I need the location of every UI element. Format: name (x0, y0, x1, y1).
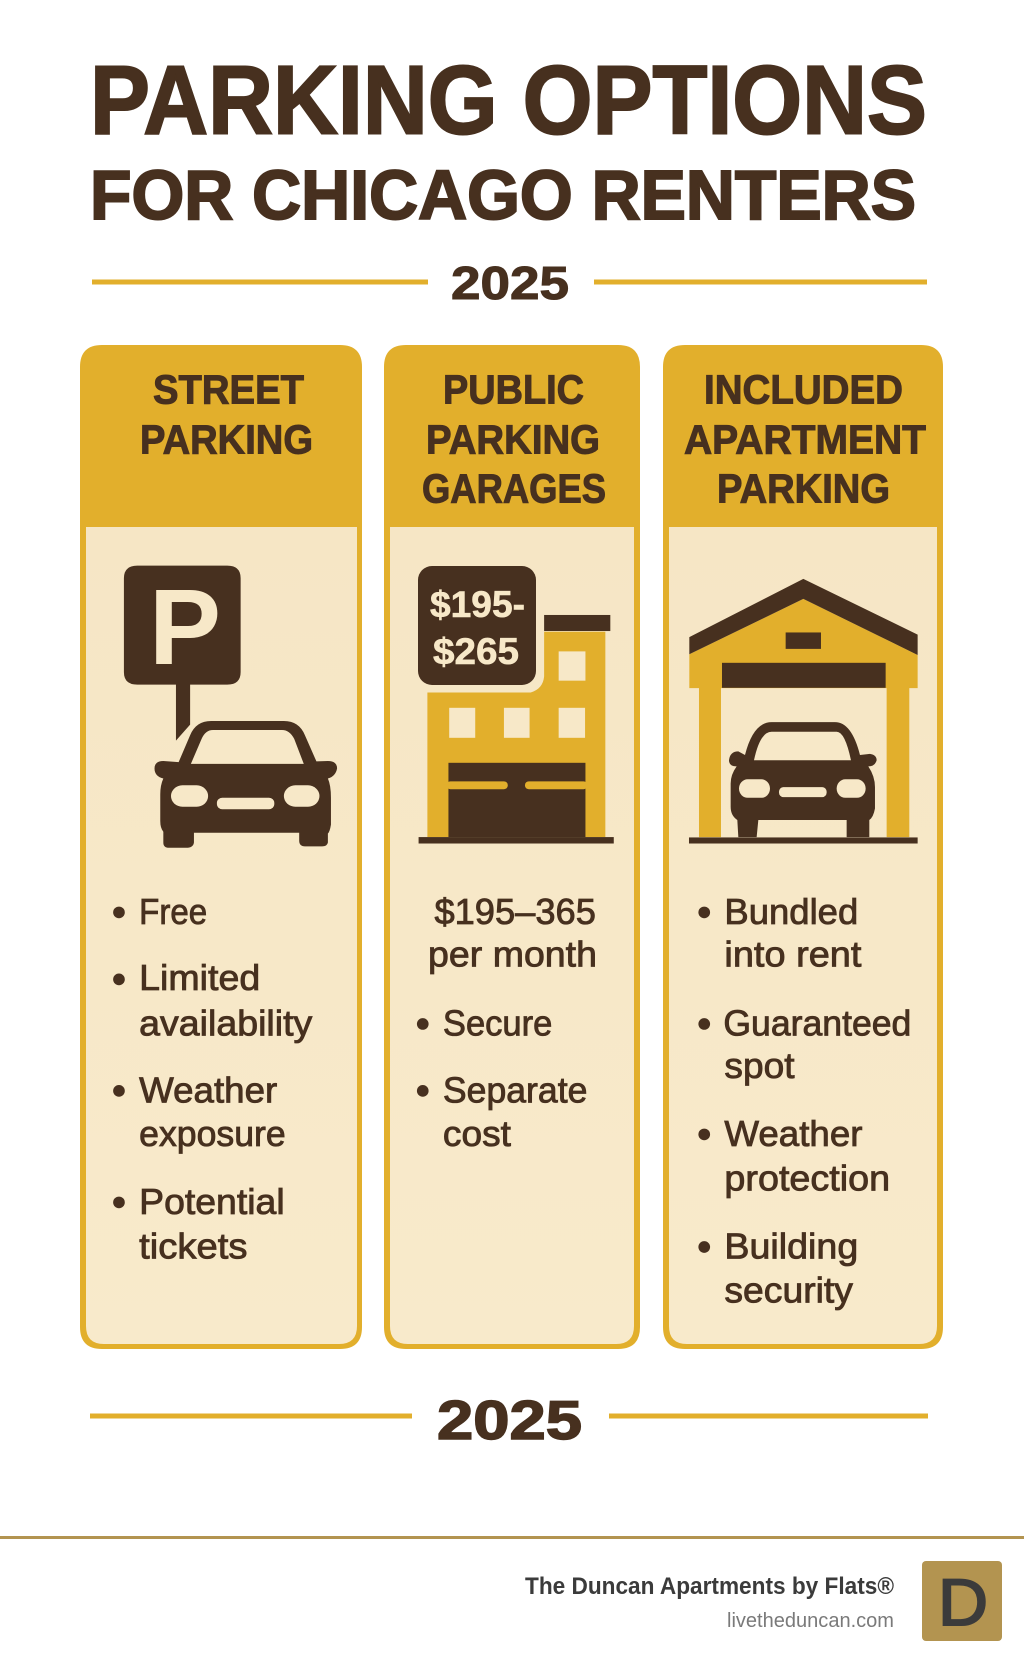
heading: included apartment parking (684, 366, 926, 512)
heading: public parking garages: PUBLIC (443, 366, 584, 412)
list: street parking points: Potential (139, 1181, 285, 1222)
heading: public parking garages: PARKING (426, 416, 600, 462)
list: included parking points: into rent (724, 934, 861, 975)
icon: parking sign (124, 566, 241, 741)
list: garage points: cost (443, 1113, 511, 1154)
title: PARKING OPTIONS (90, 46, 927, 154)
heading: public parking garages (422, 366, 606, 512)
list: included parking points: protection (724, 1158, 890, 1199)
footer brand text: The Duncan Apartments by Flats® (525, 1573, 894, 1600)
list: street parking points: Limited (139, 957, 260, 998)
heading: included apartment parking: APARTMENT (684, 416, 926, 462)
icon: parking sign: P (149, 566, 221, 687)
heading: street parking: PARKING (140, 416, 313, 462)
panel: street parking (80, 345, 362, 1349)
list: street parking points: Free (139, 891, 207, 932)
footer brand text (525, 1573, 894, 1632)
list: street parking points: availability (139, 1003, 312, 1044)
price badge: $195- (430, 584, 525, 625)
list: garage points (417, 891, 597, 1154)
heading: street parking: STREET (153, 366, 304, 412)
list: included parking points: spot (724, 1045, 795, 1086)
panel: included apartment parking (663, 345, 943, 1349)
list: street parking points: exposure (139, 1113, 286, 1154)
logo badge (922, 1561, 1002, 1641)
icon: parking garage building (419, 615, 614, 844)
heading: public parking garages: GARAGES (422, 466, 606, 512)
year footer heading: 2025 (437, 1389, 582, 1451)
list: garage points: $195–365 (434, 891, 596, 932)
heading: street parking (140, 366, 313, 462)
logo badge: D (938, 1565, 988, 1639)
list: street parking points: Weather (139, 1070, 277, 1111)
title: FOR CHICAGO RENTERS (90, 156, 916, 234)
year footer heading (90, 1389, 928, 1451)
list: included parking points: Building (724, 1226, 858, 1267)
panel: public parking garages (384, 345, 640, 1349)
heading: included apartment parking: PARKING (717, 466, 890, 512)
list: street parking points: tickets (139, 1226, 247, 1267)
list: garage points: per month (428, 934, 597, 975)
list: included parking points: Weather (724, 1113, 863, 1154)
title (90, 46, 927, 234)
list: garage points: Separate (443, 1070, 587, 1111)
price badge: $265 (433, 631, 519, 672)
footer divider (0, 1536, 1024, 1539)
list: included parking points: Bundled (724, 891, 858, 932)
heading: included apartment parking: INCLUDED (704, 366, 903, 412)
list: included parking points: Guaranteed (723, 1003, 911, 1044)
list: garage points: Secure (443, 1003, 552, 1044)
footer brand text: livetheduncan.com (727, 1610, 894, 1632)
icon: car (155, 721, 337, 848)
year subheading top (92, 257, 927, 309)
year subheading top: 2025 (451, 257, 569, 309)
list: included parking points (698, 891, 911, 1310)
icon: carport with car (689, 579, 918, 844)
list: included parking points: security (724, 1269, 853, 1310)
list: street parking points (113, 891, 312, 1267)
price badge (418, 566, 536, 685)
